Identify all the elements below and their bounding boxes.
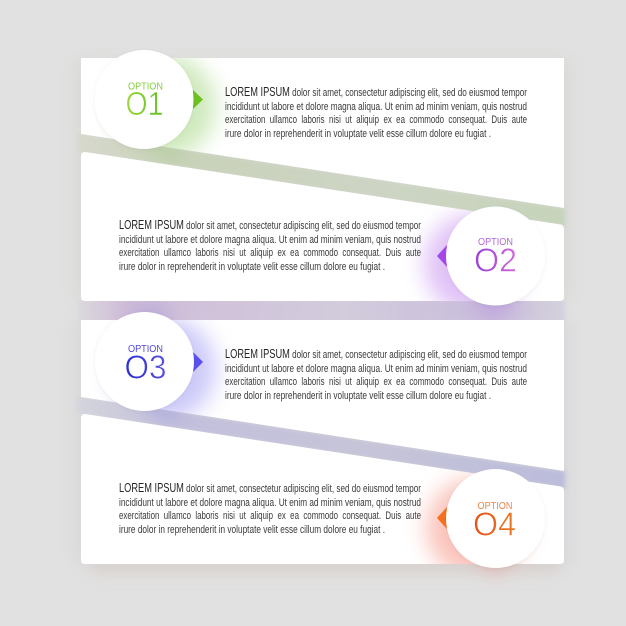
colour spill of badges onto gaps — [132, 115, 515, 572]
arrow: option 04 — [437, 507, 447, 529]
text block: option 01: LOREM IPSUM dolor sit amet, consectetur adipiscing elit, sed do eiusmod tempor — [225, 85, 527, 99]
glow: purple — [424, 214, 524, 314]
text block: option 04 — [119, 481, 421, 536]
text block: option 03 — [225, 347, 527, 402]
arrow: option 01 — [193, 90, 203, 109]
badge: option 03: OPTION — [128, 343, 163, 355]
horizontal gap shadow — [78, 298, 565, 323]
text block: option 04: irure dolor in reprehenderit in voluptate velit esse cillum dolore eu fugiat . — [119, 524, 385, 536]
text block: option 02: irure dolor in reprehenderit in voluptate velit esse cillum dolore eu fugiat . — [119, 261, 385, 273]
text block: option 02: LOREM IPSUM dolor sit amet, consectetur adipiscing elit, sed do eiusmod tempor — [119, 218, 421, 232]
text block: option 01: irure dolor in reprehenderit in voluptate velit esse cillum dolore eu fugiat . — [225, 128, 491, 140]
panel: option 04 — [81, 414, 564, 578]
text block: option 03: LOREM IPSUM dolor sit amet, consectetur adipiscing elit, sed do eiusmod tempor — [225, 347, 527, 361]
badge: option 02: O2 — [474, 242, 517, 278]
glow: blue — [112, 317, 216, 421]
text block: option 03: irure dolor in reprehenderit in voluptate velit esse cillum dolore eu fugiat . — [225, 390, 491, 402]
text block: option 03: incididunt ut labore et dolore magna aliqua. Ut enim ad minim veniam, quis nostrud — [225, 363, 527, 375]
badge: option 02: OPTION — [478, 236, 513, 248]
text block: option 04: exercitation ullamco laboris nisi ut aliquip ex ea commodo consequat. Duis aute — [119, 510, 421, 522]
panel: option 02 — [81, 152, 564, 314]
diagonal gap 2 shadow — [78, 396, 565, 489]
glow: orange — [426, 478, 526, 578]
text block: option 02 — [119, 218, 421, 273]
badge: option 03: O3 — [124, 348, 166, 386]
text block: option 01 — [225, 85, 527, 140]
arrow: option 02 — [437, 245, 447, 267]
text block: option 04: LOREM IPSUM dolor sit amet, consectetur adipiscing elit, sed do eiusmod tempor — [119, 481, 421, 495]
text block: option 04: incididunt ut labore et dolore magna aliqua. Ut enim ad minim veniam, quis nostrud — [119, 497, 421, 509]
text block: option 01: incididunt ut labore et dolore magna aliqua. Ut enim ad minim veniam, quis nostrud — [225, 101, 527, 113]
badge: option 02 — [446, 206, 545, 306]
glow: green — [112, 54, 216, 158]
soft panel shadows — [74, 60, 570, 570]
panel: option 01 — [81, 54, 564, 208]
badge: option 04: O4 — [473, 506, 516, 542]
panel: option 03 — [81, 317, 564, 471]
badge: option 01 — [94, 50, 194, 149]
badge: option 01: O1 — [126, 85, 164, 122]
badge: option 04: OPTION — [478, 500, 512, 512]
diagonal gap 1 shadow — [78, 133, 565, 226]
text block: option 02: exercitation ullamco laboris nisi ut aliquip ex ea commodo consequat. Duis aute — [119, 247, 421, 259]
arrow: option 03 — [193, 352, 203, 372]
badge: option 04 — [446, 469, 545, 568]
text block: option 02: incididunt ut labore et dolore magna aliqua. Ut enim ad minim veniam, quis nostrud — [119, 234, 421, 246]
badge: option 01: OPTION — [128, 80, 163, 92]
badge: option 03 — [95, 312, 194, 411]
